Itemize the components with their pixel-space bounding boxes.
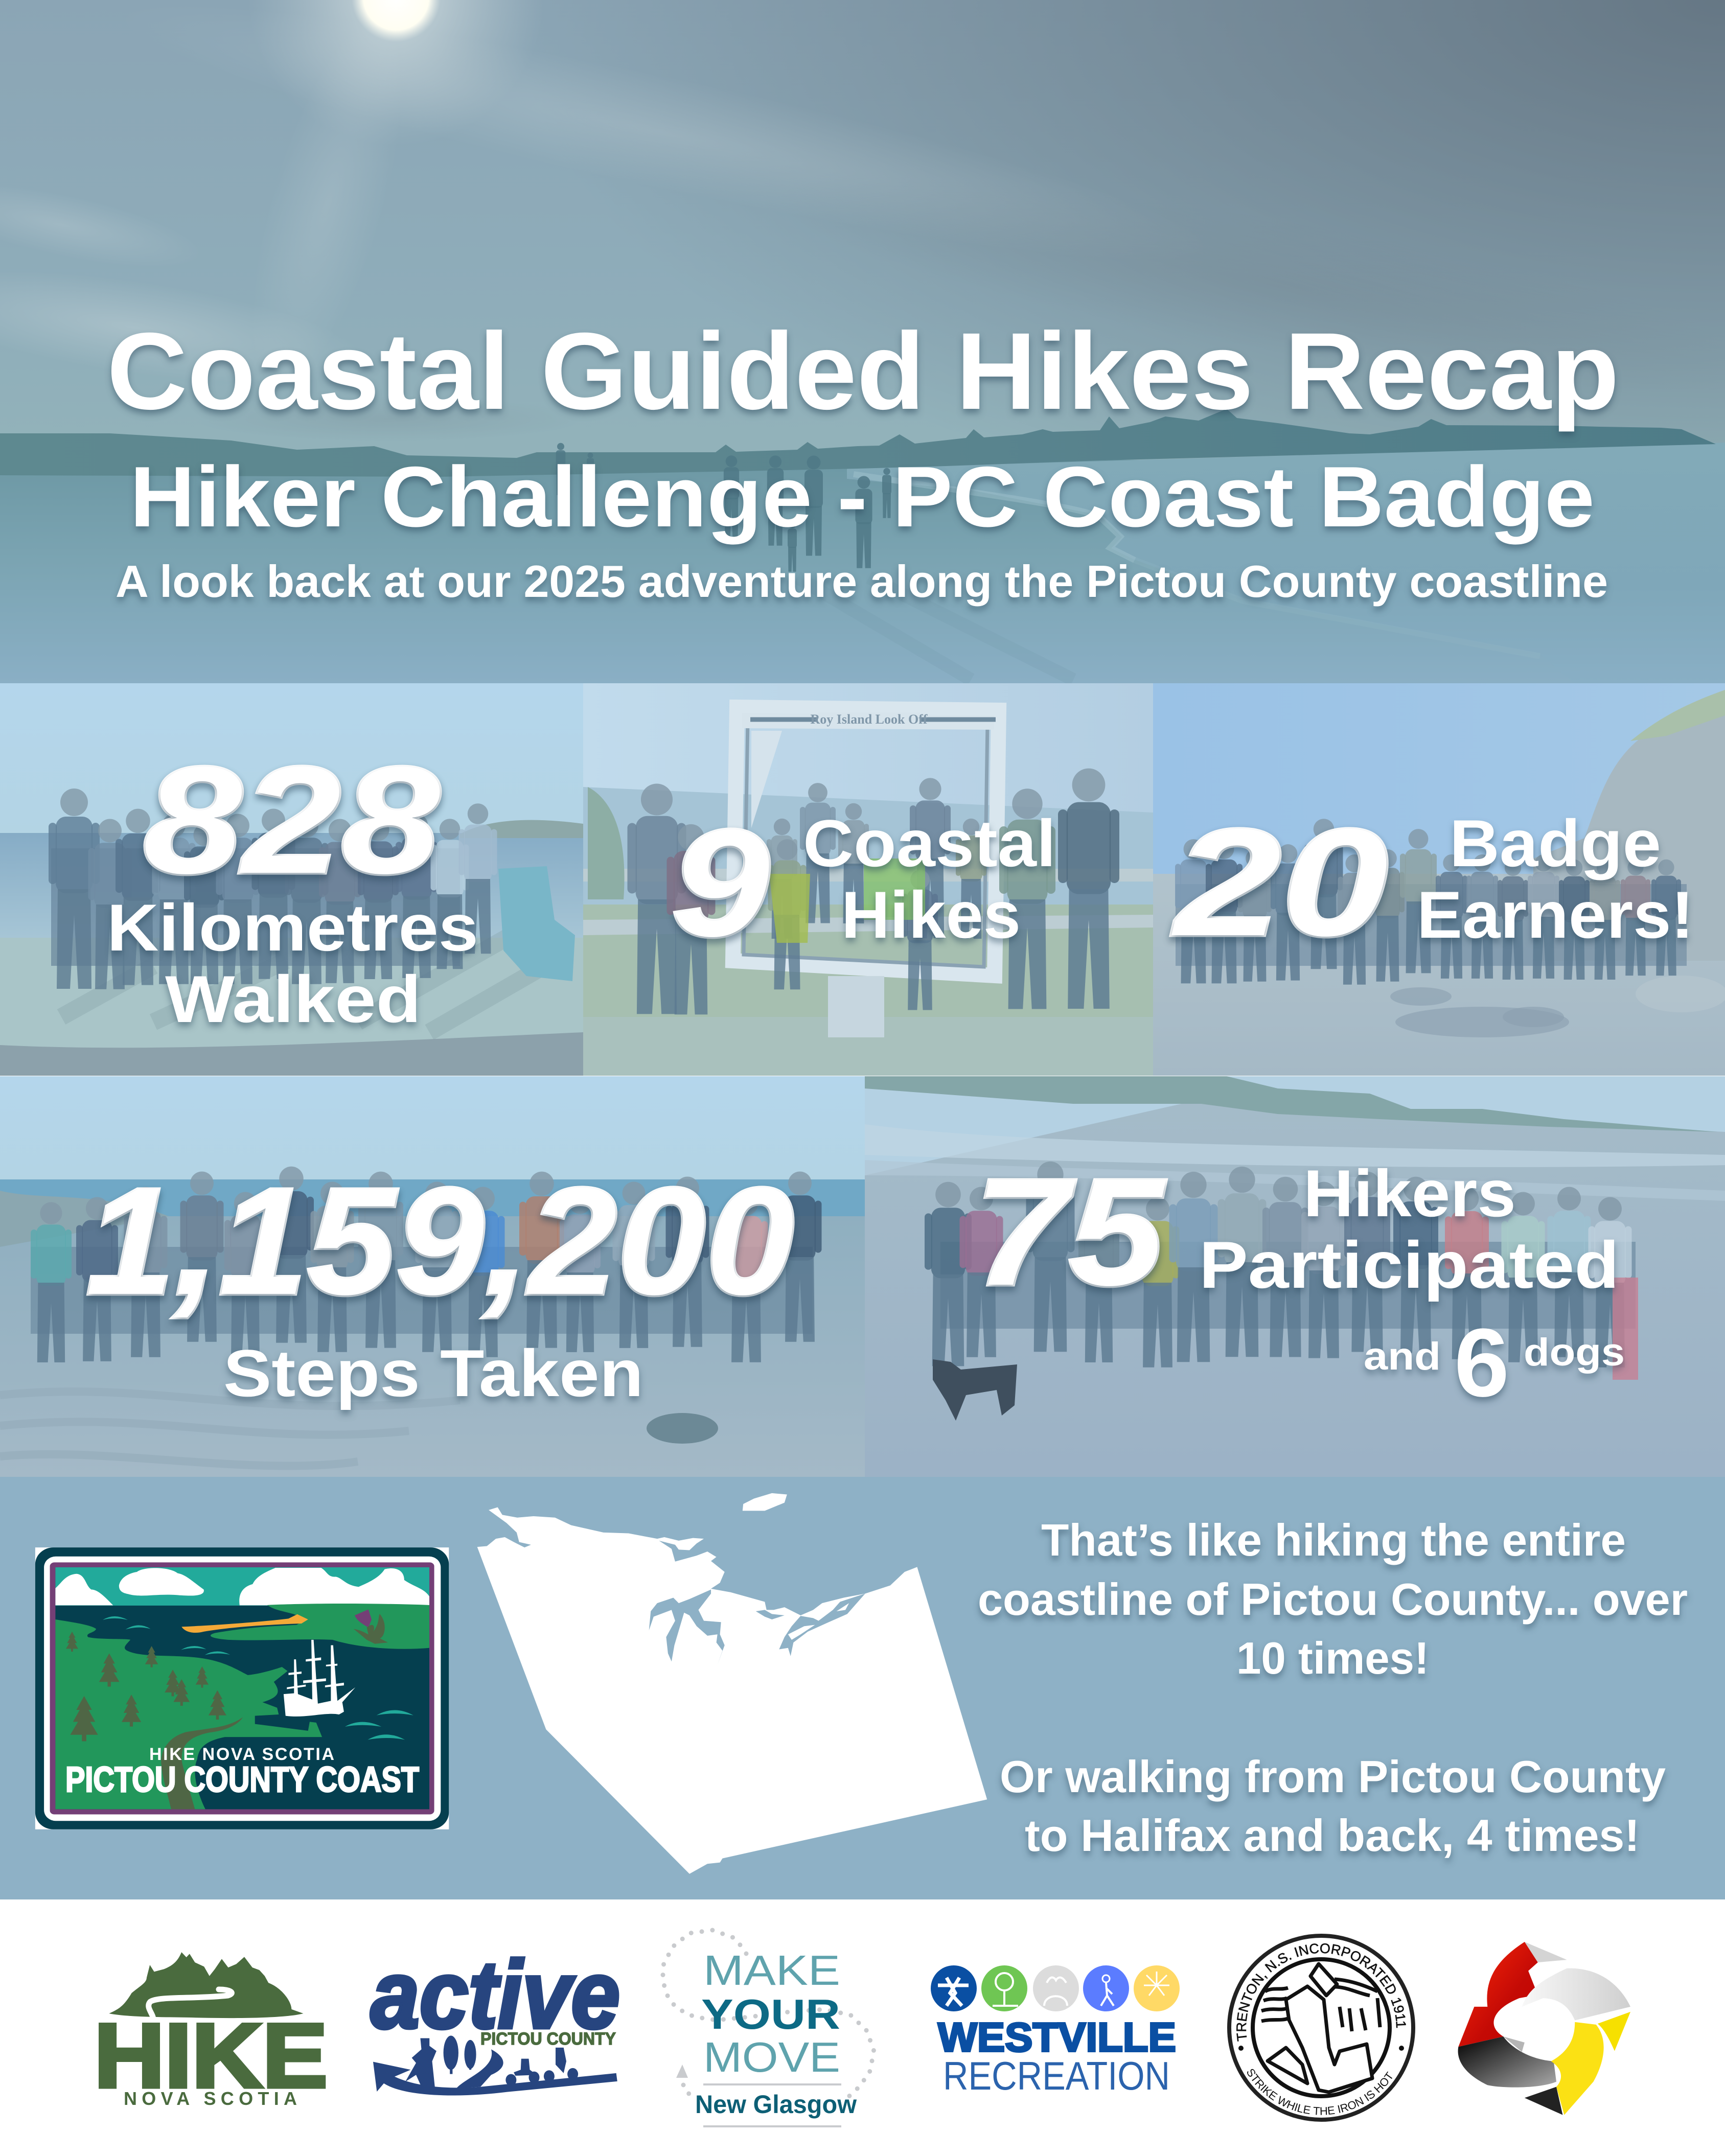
ship [284,1640,355,1717]
hi-vis vests [769,874,810,943]
logo: Westville Recreation: WESTVILLE [938,2014,1176,2060]
logo: Town of Trenton seal: TRENTON, N.S. INCORPORATED 1911 [1236,1943,1406,2042]
logo: Make Your Move New Glasgow: MOVE [703,2033,840,2081]
stat: 828 kilometres walked: Kilometres [107,890,478,965]
logo: Hike Nova Scotia: HIKE [94,2005,328,2106]
tree line [865,1076,1717,1132]
rock shadow and footprints [1390,976,1725,1037]
stat: 20 badge earners: Earners! [1417,877,1694,952]
text: coastline comparison: That’s like hiking the entire [1041,1515,1626,1565]
tidal flats [865,1124,1725,1167]
logo: Westville Recreation: RECREATION [943,2053,1170,2098]
text: coastline comparison [978,1515,1688,1683]
orange sandbar [181,1614,308,1633]
tagline: A look back at our 2025 adventure along the Pictou County coastline [116,556,1608,607]
panel: sponsor footer [0,1899,1725,2156]
panel: badge earners photo [1153,683,1725,1076]
stat: 75 hikers participated and 6 dogs: Hikers [1303,1156,1516,1231]
stat: 75 hikers participated and 6 dogs: and [1364,1335,1441,1378]
logo: Make Your Move New Glasgow [663,1930,874,2127]
stat: 75 hikers participated and 6 dogs [974,1147,1625,1417]
logo: Make Your Move New Glasgow: New Glasgow [695,2090,857,2119]
sand cliff [1533,690,1725,961]
stat: 9 coastal hikes: Coastal [803,806,1056,880]
stat: 9 coastal hikes [671,798,1056,968]
subtitle: Hiker Challenge - PC Coast Badge [130,449,1595,545]
Roy Island look-off frame: Roy Island Look Off [811,712,928,727]
group of hikers [49,789,497,989]
panel: kilometres photo [0,683,583,1076]
group of hikers [925,1162,1636,1367]
stat: 1,159,200 steps taken: Steps Taken [223,1336,643,1410]
waves [103,1616,413,1740]
group of hikers [31,1167,822,1362]
trail [161,1717,243,1809]
text: Halifax comparison: Or walking from Pictou County [1000,1751,1666,1802]
stat: 1,159,200 steps taken: 1,159,200 [86,1156,794,1327]
panel: coastal hikes photo [583,683,1153,1076]
foot shadows on sand [797,577,1073,680]
clouds [55,1568,429,1605]
seaweed [647,1413,718,1444]
stat: 828 kilometres walked: Walked [165,962,421,1036]
activity circles [931,1965,1180,2011]
islands in inlet [788,1599,849,1640]
text: Halifax comparison: to Halifax and back, 4 times! [1025,1810,1640,1861]
blue adirondack chair [498,866,575,981]
text: Halifax comparison [1000,1751,1666,1861]
shrub [588,787,625,899]
panel: steps taken photo [0,1076,865,1477]
far land [211,1604,429,1649]
stat: 828 kilometres walked [107,735,478,1036]
inlets [649,1590,725,1665]
icon: Pictou County Coast badge: PICTOU COUNTY COAST [65,1759,419,1799]
logo: Active Pictou County: active [371,1941,620,2048]
stat: 20 badge earners: 20 [1171,798,1388,968]
logo: Active Pictou County [371,1941,620,2096]
icon: map of Pictou County [477,1493,987,1874]
sun [248,0,544,146]
trees [66,1632,226,1741]
dog [933,1359,1017,1421]
logo: Active Pictou County: PICTOU COUNTY [480,2029,616,2049]
group of hikers [1175,819,1687,985]
text: coastline comparison: 10 times! [1236,1633,1429,1683]
logo: Hike Nova Scotia [94,1952,328,2109]
group of hikers around frame [628,769,1119,1014]
logo: four-colour medicine wheel emblem [1458,1942,1630,2115]
Roy Island look-off frame [733,707,999,1037]
cloud streaks [0,0,1725,442]
green shirt [864,859,925,920]
text: coastline comparison: coastline of Pictou County... over [978,1574,1688,1625]
logo: Westville Recreation [931,1965,1180,2098]
stat: 20 badge earners [1171,798,1694,968]
stat: 9 coastal hikes: Hikes [841,877,1021,952]
stat: 1,159,200 steps taken [86,1156,794,1410]
beach [0,460,1725,683]
stat: 75 hikers participated and 6 dogs: Participated [1199,1227,1619,1302]
stat: 75 hikers participated and 6 dogs: 75 [974,1147,1167,1317]
panel: hikers participated photo [865,1073,1725,1477]
hammer, arm and house art [1261,1964,1380,2092]
panel: info band [0,1477,1725,1899]
panel: hero photo of hikers on beach at sunset [0,0,1725,683]
logo: Make Your Move New Glasgow: MAKE [703,1946,840,1994]
hikers silhouettes [556,443,891,572]
stat: 75 hikers participated and 6 dogs: 6 [1454,1309,1509,1417]
logo: Town of Trenton seal [1227,1934,1415,2122]
logo: Hike Nova Scotia: NOVA SCOTIA [124,2088,297,2109]
sea [847,443,1725,683]
thistle [355,1609,372,1628]
logo: Make Your Move New Glasgow: YOUR [701,1990,840,2038]
icon: Pictou County Coast badge [35,1547,449,1829]
stat: 75 hikers participated and 6 dogs: dogs [1524,1331,1625,1374]
stat: 828 kilometres walked: 828 [143,735,441,906]
headland silhouette [0,409,1716,477]
title: Coastal Guided Hikes Recap [107,310,1619,432]
logo: Town of Trenton seal: STRIKE WHILE THE IRON IS HOT [1247,2069,1392,2115]
near land [55,1619,322,1809]
stat: 20 badge earners: Badge [1450,806,1661,880]
badge text: HIKE NOVA SCOTIA [149,1745,334,1764]
stat: 9 coastal hikes: 9 [671,798,771,968]
